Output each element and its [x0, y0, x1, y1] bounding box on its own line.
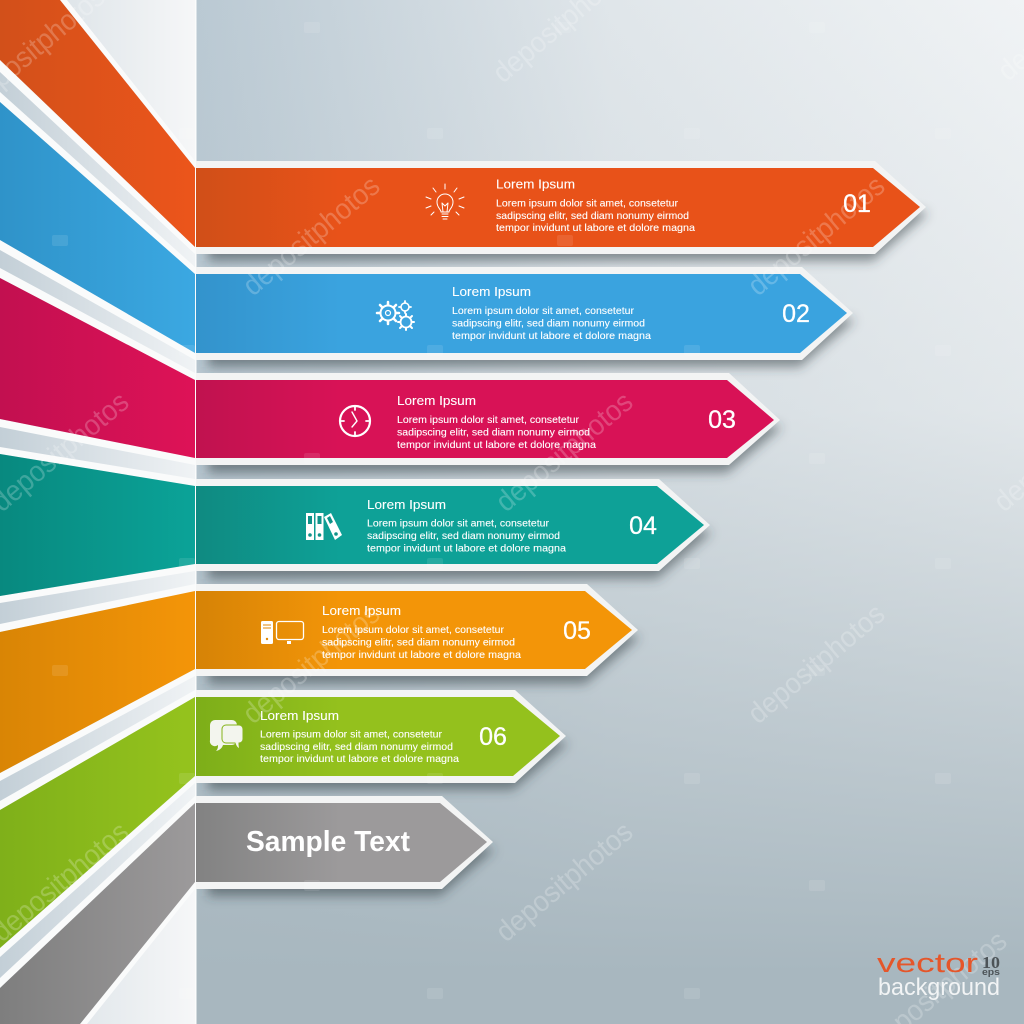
wall edge highlights: [60, 0, 195, 1024]
band gaps: [0, 60, 195, 988]
text: item 02: sadipscing elitr, sed diam nonumy eirmod: [452, 318, 645, 330]
text: item 03: tempor invidunt ut labore et dolore magna: [397, 439, 596, 451]
number 06: 06: [479, 723, 507, 751]
number 01: 01: [843, 190, 871, 218]
text: item 01: [496, 176, 695, 234]
arrow 04: teal: [196, 479, 710, 571]
band: blue: [0, 102, 195, 353]
text: item 03: [397, 393, 596, 451]
arrow 07: grey sample text: [196, 796, 493, 889]
arrow 03: crimson: [196, 373, 780, 465]
watermarks: depositphotos: [742, 598, 891, 730]
text: item 02: [452, 284, 651, 342]
text: item 03: sadipscing elitr, sed diam nonumy eirmod: [397, 426, 590, 438]
text: item 01: Lorem Ipsum: [496, 176, 575, 192]
icon: light bulb: [426, 184, 464, 219]
icon: speech bubbles: [210, 720, 243, 751]
arrow 02: blue: [196, 267, 853, 360]
text: item 01: tempor invidunt ut labore et dolore magna: [496, 222, 695, 234]
logo: vector background: vector: [877, 948, 978, 978]
arrow 05: amber: [196, 584, 638, 676]
perspective bands on the wall: [0, 0, 195, 1024]
watermarks: depositphotos: [237, 170, 386, 302]
watermarks: depositphotos: [237, 598, 386, 730]
text: item 06: sadipscing elitr, sed diam nonumy eirmod: [260, 741, 453, 753]
text: item 06: tempor invidunt ut labore et dolore magna: [260, 753, 459, 765]
text: item 02: Lorem ipsum dolor sit amet, consetetur: [452, 305, 634, 317]
arrow 01: orange: [196, 161, 926, 254]
text: item 02: Lorem Ipsum: [452, 284, 531, 299]
icon: computer: [261, 621, 304, 644]
band: teal: [0, 454, 195, 596]
text: item 05: sadipscing elitr, sed diam nonumy eirmod: [322, 636, 515, 648]
logo: vector background: [877, 948, 1000, 1001]
arrow drop shadows: [208, 200, 928, 896]
text: item 03: Lorem Ipsum: [397, 393, 476, 408]
arrow 06: green: [196, 690, 566, 783]
number 03: 03: [708, 406, 736, 434]
band: crimson: [0, 278, 195, 458]
logo: vector background: background: [878, 974, 1000, 1001]
text: item 06: Lorem Ipsum: [260, 708, 339, 723]
heading: sample text: Sample Text: [246, 826, 410, 858]
band: orange: [0, 0, 195, 247]
band: green: [0, 697, 195, 948]
text: item 06: [260, 708, 459, 765]
text: item 05: Lorem Ipsum: [322, 603, 401, 618]
text: item 05: Lorem ipsum dolor sit amet, consetetur: [322, 624, 504, 636]
text: item 01: sadipscing elitr, sed diam nonumy eirmod: [496, 210, 689, 222]
text: item 02: tempor invidunt ut labore et dolore magna: [452, 330, 651, 342]
text: item 01: Lorem ipsum dolor sit amet, consetetur: [496, 198, 678, 210]
text: item 04: Lorem Ipsum: [367, 497, 446, 512]
text: item 06: Lorem ipsum dolor sit amet, consetetur: [260, 728, 442, 740]
logo: vector background: 10: [982, 953, 1000, 972]
logo: vector background: eps: [982, 967, 1000, 978]
text: item 04: tempor invidunt ut labore et dolore magna: [367, 542, 566, 554]
band: amber: [0, 591, 195, 773]
number 04: 04: [629, 512, 657, 540]
watermarks: depositphotos: [742, 170, 891, 302]
number 05: 05: [563, 617, 591, 645]
band: grey: [0, 803, 195, 1024]
left wall panel: [0, 0, 196, 1024]
text: item 04: Lorem ipsum dolor sit amet, consetetur: [367, 518, 549, 530]
text: item 04: [367, 497, 566, 554]
text: item 05: [322, 603, 521, 661]
watermarks: depositphotos: [490, 386, 639, 518]
icon: gears: [377, 301, 414, 330]
number 02: 02: [782, 300, 810, 328]
text: item 05: tempor invidunt ut labore et dolore magna: [322, 649, 521, 661]
text: item 03: Lorem ipsum dolor sit amet, consetetur: [397, 414, 579, 426]
icon: binders: [306, 513, 342, 540]
icon: clock: [340, 406, 370, 436]
watermarks: depositphotos: [490, 816, 639, 948]
text: item 04: sadipscing elitr, sed diam nonumy eirmod: [367, 530, 560, 542]
